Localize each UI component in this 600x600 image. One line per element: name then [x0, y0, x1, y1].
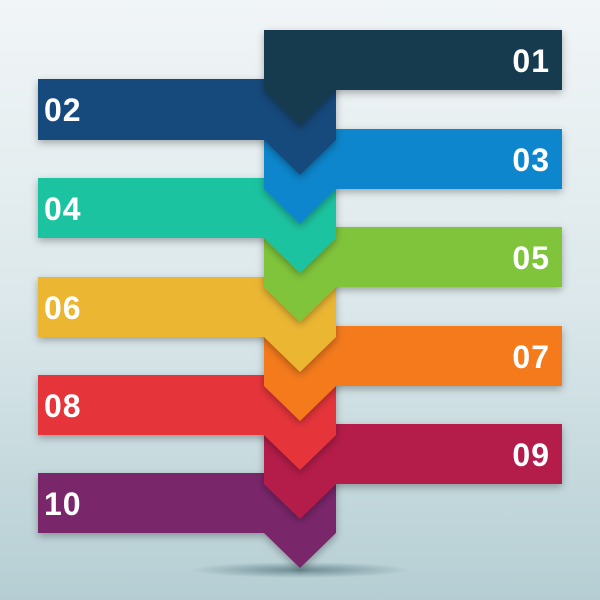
step 05: 05 [512, 240, 550, 276]
step 03 [264, 129, 562, 224]
step 01 [264, 30, 562, 126]
step 07 [264, 326, 562, 421]
step 04: 04 [44, 191, 82, 227]
step 02: 02 [44, 92, 82, 128]
step 07: 07 [512, 339, 550, 375]
step 06: 06 [44, 290, 82, 326]
floor shadow [190, 562, 410, 578]
step 05 [264, 227, 562, 322]
step 10: 10 [44, 486, 82, 522]
step 04 [38, 178, 336, 273]
step 09: 09 [512, 437, 550, 473]
step 03: 03 [512, 142, 550, 178]
step 09 [264, 424, 562, 519]
step 08: 08 [44, 388, 82, 424]
step 10 [38, 473, 336, 568]
step 08 [38, 375, 336, 470]
step 06 [38, 277, 336, 372]
step 02 [38, 79, 336, 175]
step 01: 01 [512, 43, 550, 79]
